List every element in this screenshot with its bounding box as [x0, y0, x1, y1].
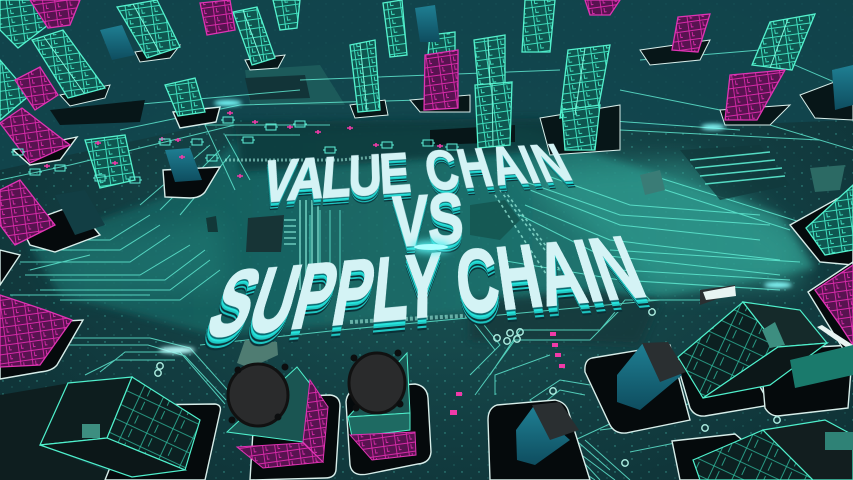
lens flare over title — [414, 244, 448, 250]
dark caps on the blue columns — [206, 165, 845, 440]
title: Value Chain vs Supply Chain — [192, 134, 659, 361]
cube: lower right wireframe — [678, 302, 853, 398]
tower corner edges — [44, 4, 788, 147]
white blocks — [703, 286, 853, 352]
title line: vs: VS — [392, 178, 464, 262]
title line: Supply Chain: SUPPLY CHAIN — [192, 221, 659, 361]
pads under the towers — [50, 40, 853, 155]
lens flares — [159, 100, 792, 354]
small chip glyphs and rings — [11, 117, 780, 466]
magenta markers — [44, 111, 565, 415]
cylinder module 1 — [227, 364, 328, 468]
towers: teal — [0, 0, 853, 255]
central teal glowing plate — [30, 118, 815, 345]
cube: lower left wireframe — [40, 377, 200, 477]
circuit chips on the plate — [225, 145, 790, 322]
cube: bottom right wireframe — [693, 420, 853, 480]
pads on the circuit board — [0, 107, 853, 480]
title line: Value Chain: VALUE CHAIN — [255, 134, 583, 217]
cylinder module 2 — [348, 350, 416, 460]
towers: magenta — [0, 0, 853, 367]
